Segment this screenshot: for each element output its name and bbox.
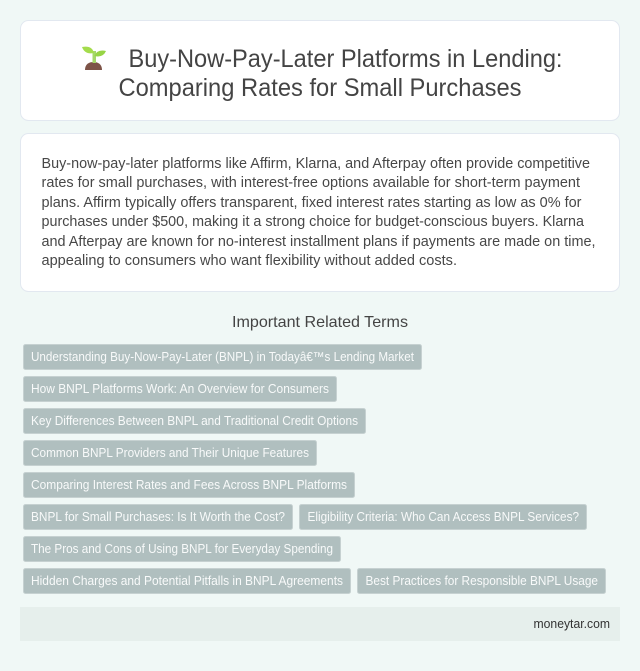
chip 2: [24, 376, 336, 402]
chip 4: Common BNPL Providers and Their Unique Features: [31, 446, 309, 460]
chip 5: [24, 472, 354, 498]
title: [118, 45, 562, 102]
chip 5: Comparing Interest Rates and Fees Across BNPL Platforms: [31, 478, 347, 492]
panel: title card: [20, 20, 620, 120]
chip 10: [358, 568, 606, 594]
chip 7: Eligibility Criteria: Who Can Access BNPL Services?: [308, 510, 579, 524]
chip 9: [24, 568, 350, 594]
chip 3: [24, 408, 366, 434]
chip 6: [24, 504, 292, 530]
summary text: rates for small purchases, with interest-free options available for short-term payment: [42, 174, 581, 191]
chip 6: BNPL for Small Purchases: Is It Worth the Cost?: [31, 510, 285, 524]
icon: seedling: [82, 47, 106, 70]
chip 1: Understanding Buy-Now-Pay-Later (BNPL) in Todayâ€™s Lending Market: [31, 350, 414, 364]
summary text: appealing to consumers who want flexibility without added costs.: [42, 252, 457, 269]
chip 2: How BNPL Platforms Work: An Overview for Consumers: [31, 382, 329, 396]
chip 9: Hidden Charges and Potential Pitfalls in BNPL Agreements: [31, 574, 343, 588]
summary text: Buy-now-pay-later platforms like Affirm, Klarna, and Afterpay often provide competitive: [42, 155, 590, 172]
summary text: [42, 155, 596, 269]
summary text: and Afterpay are known for no-interest installment plans if payments are made on time,: [42, 233, 596, 250]
chip 3: Key Differences Between BNPL and Traditional Credit Options: [31, 414, 358, 428]
chip 4: [24, 440, 316, 466]
footer: moneytar.com: [534, 617, 610, 631]
chip 1: [24, 344, 422, 370]
chip 8: [24, 536, 340, 562]
heading: related terms: Important Related Terms: [232, 314, 408, 331]
chip 7: [300, 504, 586, 530]
chip 8: The Pros and Cons of Using BNPL for Everyday Spending: [31, 542, 333, 556]
panel: summary: [20, 134, 620, 292]
term chips: [24, 344, 606, 594]
chip 10: Best Practices for Responsible BNPL Usage: [366, 574, 598, 588]
footer: [20, 607, 620, 641]
summary text: purchases under $500, making it a strong choice for budget-conscious buyers. Klarna: [42, 213, 585, 230]
title: Comparing Rates for Small Purchases: [118, 74, 522, 102]
summary text: plans. Affirm typically offers transparent, fixed interest rates starting as low as 0% for: [42, 194, 582, 211]
title: Buy-Now-Pay-Later Platforms in Lending:: [128, 45, 562, 73]
